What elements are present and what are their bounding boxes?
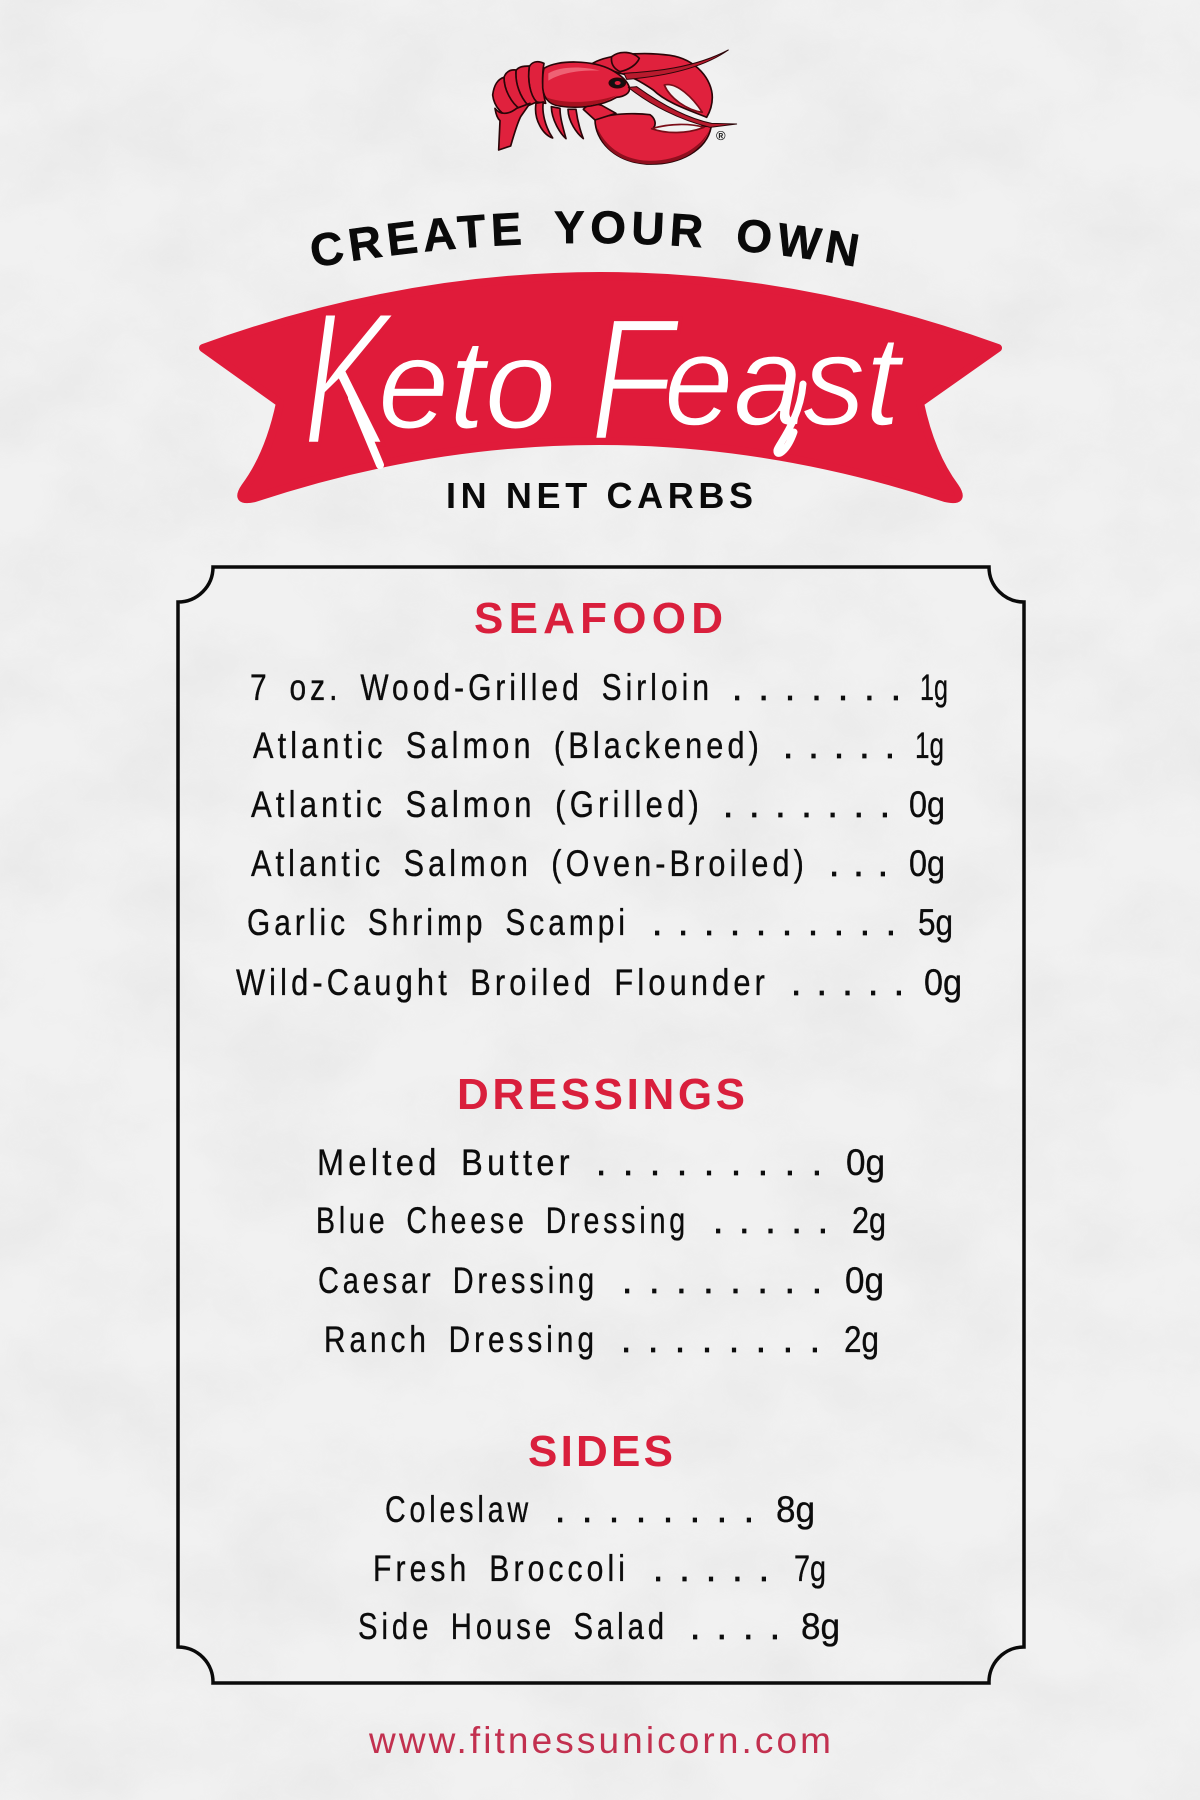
heading: dressings: DRESSINGS [457, 1070, 745, 1119]
item: house salad: . . . . [690, 1606, 780, 1647]
item: sirloin: 1g [920, 667, 948, 708]
title: keto feast: K [303, 273, 396, 485]
heading: seafood: SEAFOOD [474, 594, 723, 643]
item: caesar: . . . . . . . . [622, 1260, 822, 1301]
item: flounder: Wild-Caught Broiled Flounder [236, 962, 769, 1003]
item: flounder: 0g [924, 962, 962, 1003]
panel: seafood section [236, 594, 962, 1003]
item: broccoli: Fresh Broccoli [373, 1548, 629, 1589]
item: coleslaw: 8g [776, 1489, 815, 1530]
item: shrimp scampi: . . . . . . . . . . [652, 902, 896, 943]
item: caesar: 0g [845, 1260, 884, 1301]
antennae [624, 50, 737, 127]
item: blue cheese: Blue Cheese Dressing [316, 1200, 689, 1241]
registered mark: ® [716, 128, 726, 143]
red ribbon banner [203, 276, 998, 499]
carapace [543, 62, 629, 107]
heading: sides: SIDES [528, 1427, 673, 1476]
item: salmon oven-broiled: 0g [909, 843, 945, 884]
item: shrimp scampi: 5g [918, 902, 953, 943]
footer: website url: www.fitnessunicorn.com [368, 1720, 831, 1761]
panel: sides section [358, 1427, 840, 1647]
item: salmon grilled: Atlantic Salmon (Grilled) [251, 784, 703, 825]
tail segments [493, 62, 546, 150]
item: sirloin: 7 oz. Wood-Grilled Sirloin [250, 667, 713, 708]
item: salmon blackened: . . . . . [783, 725, 895, 766]
item: coleslaw: Coleslaw [385, 1489, 532, 1530]
item: blue cheese: 2g [852, 1200, 886, 1241]
item: melted butter: . . . . . . . . . [596, 1142, 822, 1183]
icon: red lobster logo [493, 50, 737, 164]
legs [536, 102, 583, 139]
item: ranch: Ranch Dressing [324, 1319, 598, 1360]
item: melted butter: Melted Butter [317, 1142, 574, 1183]
heading: create your own: CREATE YOUR OWN [312, 210, 858, 266]
item: ranch: 2g [844, 1319, 879, 1360]
item: salmon blackened: Atlantic Salmon (Blackened) [253, 725, 763, 766]
title: keto feast: eto [378, 313, 556, 456]
item: blue cheese: . . . . . [713, 1200, 828, 1241]
item: flounder: . . . . . [791, 962, 904, 1003]
item: salmon grilled: . . . . . . . [723, 784, 890, 825]
item: shrimp scampi: Garlic Shrimp Scampi [247, 902, 629, 943]
item: ranch: . . . . . . . . [621, 1319, 820, 1360]
item: salmon oven-broiled: Atlantic Salmon (Oven-Broiled) [251, 843, 808, 884]
item: coleslaw: . . . . . . . . [555, 1489, 754, 1530]
title: keto feast: F [590, 282, 681, 478]
item: broccoli: 7g [794, 1548, 826, 1589]
item: salmon grilled: 0g [909, 784, 945, 825]
item: house salad: 8g [801, 1606, 840, 1647]
item: salmon blackened: 1g [915, 725, 944, 766]
panel: menu card frame [178, 567, 1024, 1683]
panel: dressings section [316, 1070, 886, 1360]
item: caesar: Caesar Dressing [318, 1260, 598, 1301]
item: broccoli: . . . . . [653, 1548, 769, 1589]
item: salmon oven-broiled: . . . [829, 843, 888, 884]
subheading: in net carbs: IN NET CARBS [446, 475, 753, 516]
item: sirloin: . . . . . . . [732, 667, 901, 708]
title: keto feast [303, 273, 904, 485]
item: house salad: Side House Salad [358, 1606, 668, 1647]
title: keto feast: east [664, 310, 904, 453]
item: melted butter: 0g [846, 1142, 885, 1183]
eye [609, 78, 625, 88]
